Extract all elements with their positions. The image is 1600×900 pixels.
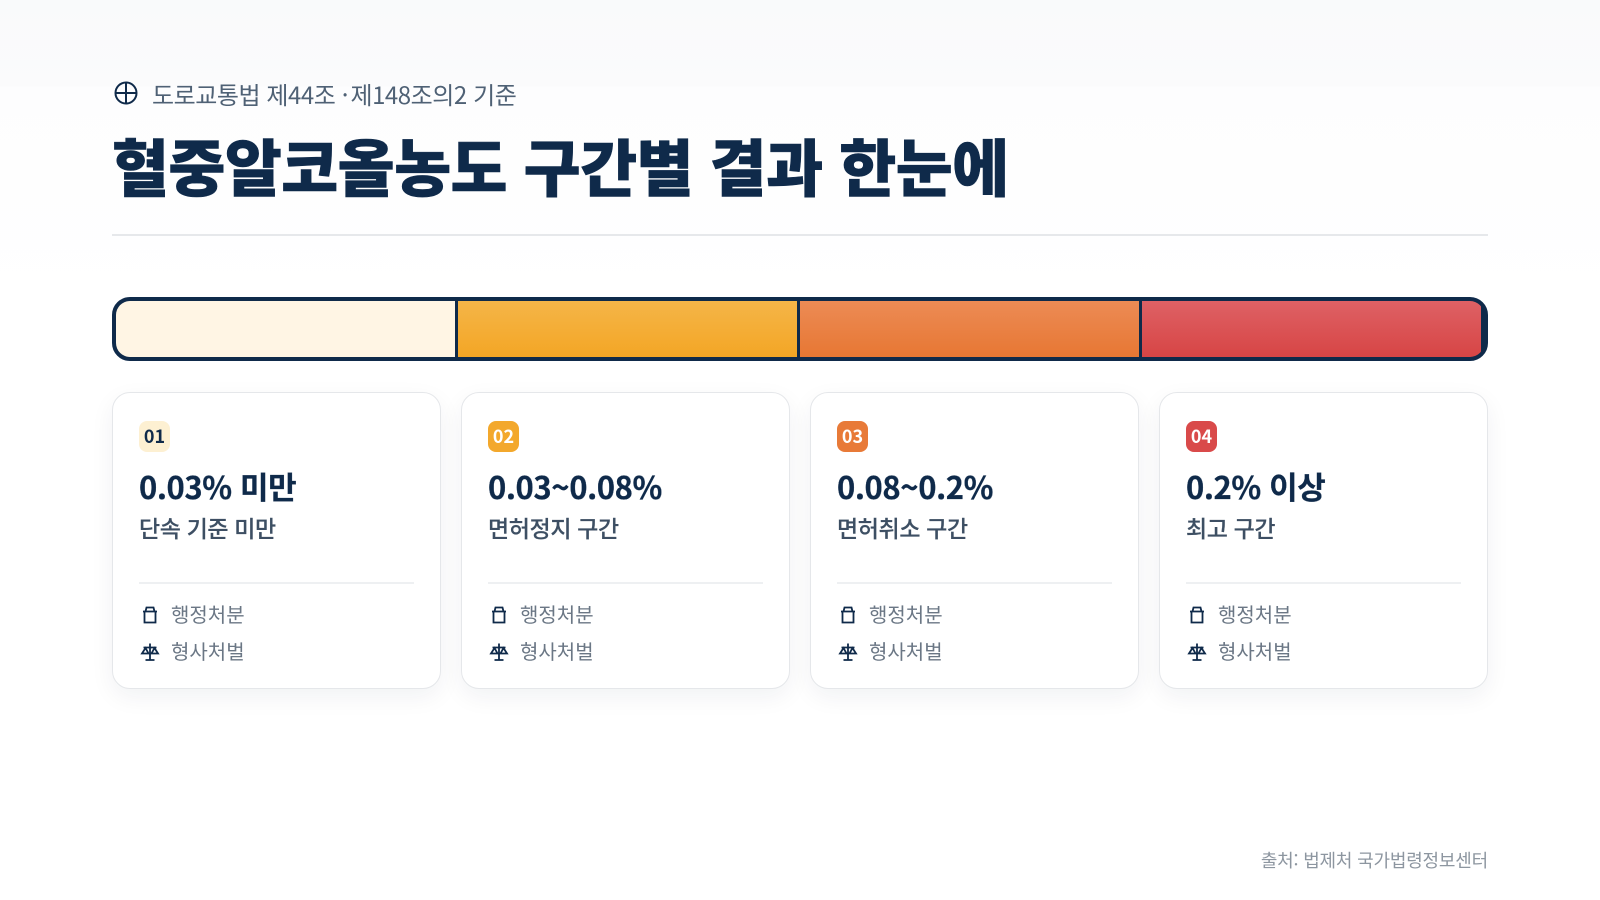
row: criminal: 형사처벌: [171, 636, 245, 665]
panel: card 2: [461, 392, 790, 689]
segment 3: [800, 301, 1142, 357]
row: criminal: 형사처벌: [869, 636, 943, 665]
badge 01: 01: [144, 423, 165, 449]
range description: 면허취소 구간: [837, 510, 968, 544]
panel: card 1: [112, 392, 441, 689]
source footer: 출처: 법제처 국가법령정보센터: [1261, 847, 1488, 873]
row: administrative: 행정처분: [1218, 599, 1292, 628]
range description: 면허정지 구간: [488, 510, 619, 544]
badge 03: 03: [842, 423, 863, 449]
badge 02: [488, 421, 519, 452]
segment 1: [116, 301, 458, 357]
range heading: 0.03~0.08%: [488, 462, 662, 508]
range heading: 0.2% 이상: [1186, 462, 1325, 508]
severity bar: [112, 297, 1488, 361]
badge 04: 04: [1191, 423, 1212, 449]
row: criminal: 형사처벌: [1218, 636, 1292, 665]
segment 2: [458, 301, 800, 357]
row: administrative: 행정처분: [869, 599, 943, 628]
icon: globe: [114, 82, 138, 104]
row: administrative: 행정처분: [520, 599, 594, 628]
row: administrative: 행정처분: [171, 599, 245, 628]
eyebrow text: 도로교통법 제44조 ·제148조의2 기준: [152, 76, 516, 111]
range heading: 0.08~0.2%: [837, 462, 993, 508]
panel: card 3: [810, 392, 1139, 689]
range heading: 0.03% 미만: [139, 462, 296, 508]
header eyebrow: [114, 76, 516, 111]
panel: card 4: [1159, 392, 1488, 689]
range description: 최고 구간: [1186, 510, 1275, 544]
range description: 단속 기준 미만: [139, 510, 276, 544]
badge 04: [1186, 421, 1217, 452]
segment 4: [1142, 301, 1484, 357]
row: criminal: 형사처벌: [520, 636, 594, 665]
badge 02: 02: [493, 423, 514, 449]
badge 03: [837, 421, 868, 452]
badge 01: [139, 421, 170, 452]
title: 혈중알코올농도 구간별 결과 한눈에: [112, 119, 1009, 209]
